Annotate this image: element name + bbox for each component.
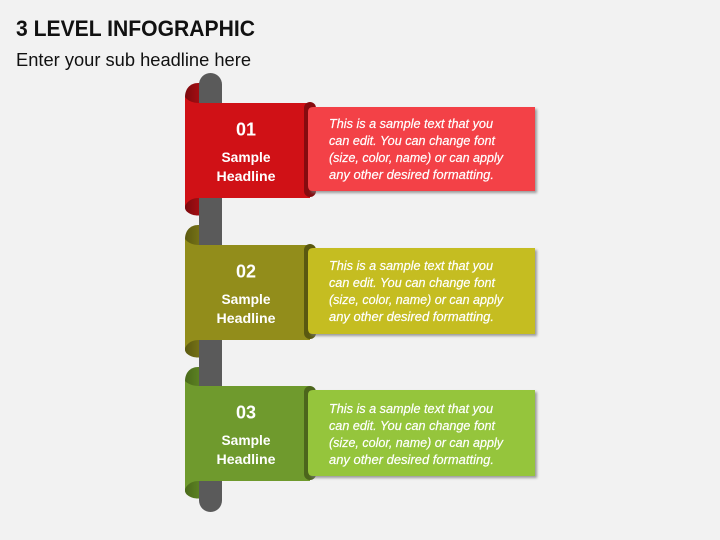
ribbon 02	[185, 239, 316, 348]
text card 03: (size, color, name) or can apply	[329, 436, 504, 450]
label 01: Sample	[222, 149, 271, 165]
vertical pole	[199, 73, 222, 512]
subtitle: Enter your sub headline here	[16, 50, 251, 70]
text card 03: This is a sample text that you	[329, 402, 493, 416]
level 03	[185, 381, 537, 489]
label 01: Headline	[216, 168, 276, 184]
text card 01: This is a sample text that you	[329, 117, 493, 131]
text card 01	[308, 107, 537, 193]
label 02	[216, 291, 276, 326]
text card 02: any other desired formatting.	[329, 310, 494, 324]
text card 01: any other desired formatting.	[329, 168, 494, 182]
text card 03: any other desired formatting.	[329, 453, 494, 467]
text card 01: (size, color, name) or can apply	[329, 151, 504, 165]
label 02: Headline	[216, 310, 276, 326]
ribbon 01	[185, 97, 316, 206]
text card 02: can edit. You can change font	[329, 276, 496, 290]
level 01	[185, 97, 537, 206]
title: 3 LEVEL INFOGRAPHIC	[16, 16, 255, 41]
level 02	[185, 239, 537, 348]
ribbon 03	[185, 381, 316, 489]
number 03: 03	[236, 402, 256, 422]
label 03	[216, 432, 276, 467]
number 02: 02	[236, 262, 256, 282]
number 01: 01	[236, 120, 256, 140]
label 02: Sample	[222, 291, 271, 307]
label 03: Headline	[216, 451, 276, 467]
label 03: Sample	[222, 432, 271, 448]
text card 01: can edit. You can change font	[329, 134, 496, 148]
text card 02: (size, color, name) or can apply	[329, 293, 504, 307]
text card 02	[308, 248, 537, 336]
text card 03	[308, 390, 537, 478]
curled ribbon backs behind the pole	[185, 83, 200, 498]
label 01	[216, 149, 276, 184]
text card 03: can edit. You can change font	[329, 419, 496, 433]
text card 02: This is a sample text that you	[329, 259, 493, 273]
